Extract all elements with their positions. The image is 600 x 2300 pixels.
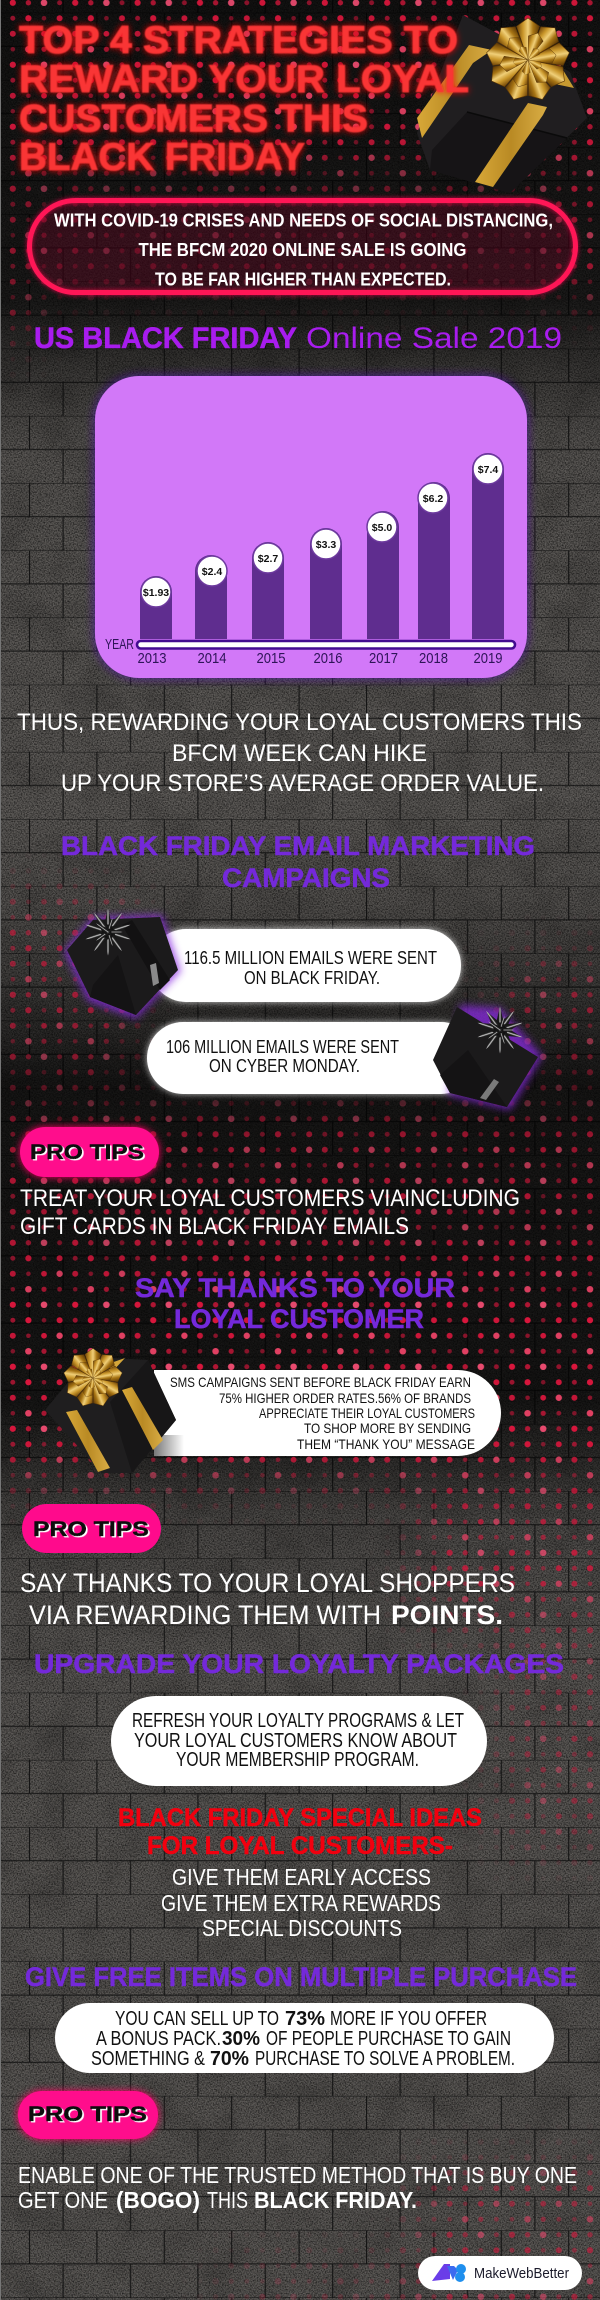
callout: Black Friday emails stat: 116.5 MILLION EMAILS WERE SENT <box>184 948 437 968</box>
callout: Cyber Monday emails stat: ON CYBER MONDAY. <box>209 1056 360 1076</box>
callout: refresh your loyalty programs: YOUR LOYAL CUSTOMERS KNOW ABOUT <box>134 1730 457 1752</box>
callout: Cyber Monday emails stat: 106 MILLION EMAILS WERE SENT <box>166 1037 399 1057</box>
badge: pro tips 1 <box>20 1127 159 1177</box>
text block: special ideas list: GIVE THEM EXTRA REWARDS <box>161 1890 441 1916</box>
logo: MakeWebBetter <box>418 2256 582 2290</box>
text block: reward with points: SAY THANKS TO YOUR LOYAL SHOPPERS <box>20 1568 515 1598</box>
heading: Black Friday special ideas: BLACK FRIDAY SPECIAL IDEAS <box>118 1804 482 1832</box>
logo: MakeWebBetter: MakeWebBetter <box>474 2266 569 2282</box>
callout: Black Friday emails stat <box>150 929 461 1002</box>
bar chart: US Black Friday online sale by year <box>95 376 527 678</box>
callout: bonus pack stats: 73% <box>285 2008 325 2030</box>
text block: buy one get one tip: (BOGO) <box>116 2187 200 2213</box>
bar: 2018: $6.2 <box>423 493 443 505</box>
text block: buy one get one tip: GET ONE <box>18 2187 108 2213</box>
bar: 2019 <box>472 453 504 667</box>
heading: say thanks to your loyal customer <box>135 1273 455 1334</box>
badge: pro tips 3 <box>18 2091 158 2139</box>
heading: give free items on multiple purchase: GIVE FREE ITEMS ON MULTIPLE PURCHASE <box>25 1962 577 1992</box>
bar: 2015: $2.7 <box>258 553 278 565</box>
title: CUSTOMERS THIS <box>19 98 368 140</box>
title: REWARD YOUR LOYAL <box>19 58 469 101</box>
bar: 2019: 2019 <box>474 650 502 667</box>
callout: bonus pack stats: MORE IF YOU OFFER <box>330 2008 487 2030</box>
text block: buy one get one tip: BLACK FRIDAY. <box>254 2187 417 2213</box>
text block: rewarding customers this BFCM week: UP YOUR STORE’S AVERAGE ORDER VALUE. <box>61 770 544 797</box>
callout: SMS campaigns stat: APPRECIATE THEIR LOYAL CUSTOMERS <box>259 1405 475 1421</box>
callout: covid-19 intro pill: WITH COVID-19 CRISES AND NEEDS OF SOCIAL DISTANCING, <box>54 210 553 230</box>
callout: refresh your loyalty programs: YOUR MEMBERSHIP PROGRAM. <box>176 1749 419 1771</box>
callout: bonus pack stats: YOU CAN SELL UP TO <box>115 2008 279 2030</box>
heading: upgrade your loyalty packages: UPGRADE YOUR LOYALTY PACKAGES <box>34 1649 564 1679</box>
text block: gift cards tip <box>20 1185 520 1240</box>
heading: US Black Friday online sale 2019: US BLACK FRIDAY <box>34 322 297 355</box>
bar: 2014 <box>195 555 227 667</box>
text block: buy one get one tip <box>18 2162 577 2213</box>
bar: 2016: 2016 <box>314 650 342 667</box>
bar: 2015: 2015 <box>256 650 286 667</box>
callout: refresh your loyalty programs <box>111 1696 487 1786</box>
text block: gift cards tip: TREAT YOUR LOYAL CUSTOMERS VIAINCLUDING <box>20 1185 520 1212</box>
callout: bonus pack stats: OF PEOPLE PURCHASE TO GAIN <box>266 2028 511 2050</box>
badge: pro tips 3: PRO TIPS <box>28 2103 147 2126</box>
bar: 2016: $3.3 <box>316 539 336 551</box>
callout: bonus pack stats: 30% <box>222 2028 260 2050</box>
bar: 2014: 2014 <box>198 650 226 667</box>
title: TOP 4 STRATEGIES TO <box>19 19 458 62</box>
callout: SMS campaigns stat <box>154 1370 501 1456</box>
text block: reward with points: VIA REWARDING THEM WITH <box>29 1600 381 1630</box>
bar: 2018: 2018 <box>419 650 448 667</box>
callout: bonus pack stats: SOMETHING & <box>91 2048 206 2070</box>
text block: reward with points <box>20 1568 515 1630</box>
badge: pro tips 2: PRO TIPS <box>33 1518 149 1541</box>
bar: 2018 <box>418 482 450 667</box>
icon: black gift box with gold ribbon <box>417 15 587 193</box>
bar: 2019: $7.4 <box>478 464 498 476</box>
heading: Black Friday email marketing campaigns: CAMPAIGNS <box>222 863 390 893</box>
chart axis: YEAR <box>105 636 134 653</box>
callout: SMS campaigns stat: TO SHOP MORE BY SENDING <box>304 1420 471 1436</box>
callout: bonus pack stats: 70% <box>210 2048 249 2070</box>
bar: 2013: $1.93 <box>143 587 169 599</box>
callout: covid-19 intro pill <box>30 200 576 292</box>
heading: Black Friday email marketing campaigns: BLACK FRIDAY EMAIL MARKETING <box>61 831 535 861</box>
title: BLACK FRIDAY <box>19 136 305 179</box>
bar: 2016 <box>310 528 342 667</box>
chart axis <box>105 636 515 653</box>
text block: special ideas list <box>161 1864 441 1941</box>
text block: buy one get one tip: THIS <box>207 2187 248 2213</box>
callout: SMS campaigns stat: SMS CAMPAIGNS SENT BEFORE BLACK FRIDAY EARN <box>170 1374 471 1390</box>
callout: Cyber Monday emails stat <box>147 1022 477 1094</box>
callout: SMS campaigns stat: 75% HIGHER ORDER RATES.56% OF BRANDS <box>219 1390 471 1406</box>
bar: 2017: 2017 <box>369 650 398 667</box>
heading: say thanks to your loyal customer: LOYAL CUSTOMER <box>174 1304 424 1334</box>
callout: covid-19 intro pill: TO BE FAR HIGHER THAN EXPECTED. <box>155 270 451 290</box>
heading: Black Friday email marketing campaigns <box>61 831 535 893</box>
bar: 2015 <box>252 542 286 667</box>
callout: refresh your loyalty programs: REFRESH YOUR LOYALTY PROGRAMS & LET <box>132 1710 464 1732</box>
bar: 2013 <box>138 576 172 667</box>
text block: gift cards tip: GIFT CARDS IN BLACK FRIDAY EMAILS <box>20 1213 409 1240</box>
bar: 2014: $2.4 <box>202 566 222 578</box>
callout: bonus pack stats: PURCHASE TO SOLVE A PROBLEM. <box>255 2048 515 2070</box>
callout: bonus pack stats <box>55 2003 554 2073</box>
text block: reward with points: POINTS. <box>391 1600 503 1630</box>
text block: rewarding customers this BFCM week: BFCM WEEK CAN HIKE <box>172 740 427 767</box>
heading: Black Friday special ideas <box>118 1804 482 1860</box>
callout: covid-19 intro pill: THE BFCM 2020 ONLINE SALE IS GOING <box>138 240 466 260</box>
heading: US Black Friday online sale 2019 <box>34 322 562 355</box>
heading: Black Friday special ideas: FOR LOYAL CUSTOMERS- <box>147 1832 453 1860</box>
bar: 2017: $5.0 <box>372 522 392 534</box>
icon: dark gift box right <box>433 1005 542 1110</box>
heading: US Black Friday online sale 2019: Online Sale 2019 <box>306 322 562 355</box>
text block: rewarding customers this BFCM week <box>17 709 582 797</box>
callout: SMS campaigns stat: THEM “THANK YOU” MESSAGE <box>297 1436 475 1452</box>
icon: gold-ribbon gift box <box>45 1348 176 1473</box>
heading: say thanks to your loyal customer: SAY THANKS TO YOUR <box>135 1273 455 1303</box>
text block: special ideas list: SPECIAL DISCOUNTS <box>202 1915 402 1941</box>
icon: dark gift box left <box>64 908 181 1019</box>
callout: bonus pack stats: A BONUS PACK. <box>96 2028 221 2050</box>
text block: special ideas list: GIVE THEM EARLY ACCESS <box>172 1864 431 1890</box>
badge: pro tips 1: PRO TIPS <box>30 1141 144 1164</box>
badge: pro tips 2 <box>22 1504 161 1553</box>
callout: Black Friday emails stat: ON BLACK FRIDAY. <box>244 968 380 988</box>
bar: 2017 <box>367 511 399 667</box>
title <box>19 19 469 179</box>
bar: 2013: 2013 <box>138 650 166 667</box>
